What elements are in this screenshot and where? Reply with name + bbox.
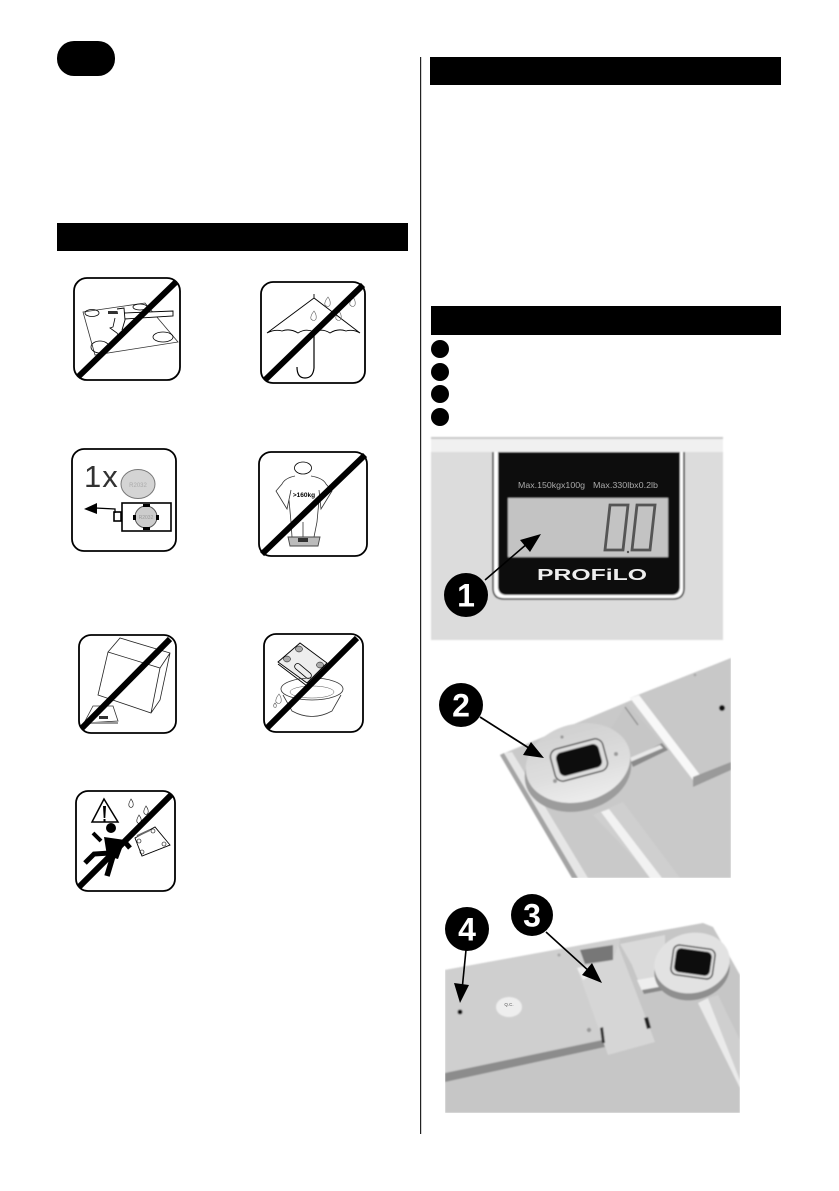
- badge 4: 4: [458, 912, 476, 948]
- badge 1: 1: [457, 578, 475, 614]
- parts list bullets: [431, 340, 449, 426]
- arrow 1: [485, 534, 541, 580]
- icon: battery replacement: [72, 449, 176, 551]
- brand name: PROFiLO: [537, 567, 647, 584]
- icon: battery replacement: R2032: [129, 483, 148, 489]
- display digits: [605, 505, 655, 553]
- badge 3: 3: [523, 898, 541, 934]
- display label: Max.330lbx0.2lb: [593, 480, 658, 490]
- arrow 4: [454, 950, 469, 1003]
- badge 2: [439, 683, 483, 727]
- column divider: [420, 57, 421, 1134]
- language badge: [57, 41, 115, 76]
- arrow 2: [480, 717, 544, 758]
- badge 3: [511, 894, 553, 936]
- display label: Max.150kgx100g: [518, 480, 585, 490]
- arrow 3: [546, 932, 602, 983]
- badge 2: 2: [452, 688, 470, 724]
- heading bar: left column: [57, 223, 408, 251]
- icon: keep dry umbrella: [261, 282, 365, 383]
- sticker text: Q.C.: [504, 1002, 514, 1007]
- icon: weight limit: >160kg: [293, 492, 315, 499]
- icon: battery replacement: 1x: [84, 459, 119, 494]
- icon: do not strike the scale: [74, 278, 180, 380]
- badge 4: [445, 907, 489, 951]
- icon: weight limit: [259, 452, 367, 556]
- photo 3: battery compartment and reset hole: [445, 894, 740, 1113]
- photo 1: scale display: [431, 437, 723, 640]
- icon: do not drop objects: [79, 635, 176, 733]
- heading bar: right column top: [430, 57, 781, 85]
- icon: slippery when wet: [76, 791, 175, 891]
- heading bar: right column parts: [431, 306, 781, 335]
- icon: battery replacement: R2032: [139, 515, 154, 521]
- display label: [518, 480, 658, 490]
- manual page: [57, 41, 781, 1134]
- icon: do not immerse in water: [264, 634, 363, 732]
- photo 2: on/off button: [439, 658, 731, 878]
- badge 1: [444, 573, 488, 617]
